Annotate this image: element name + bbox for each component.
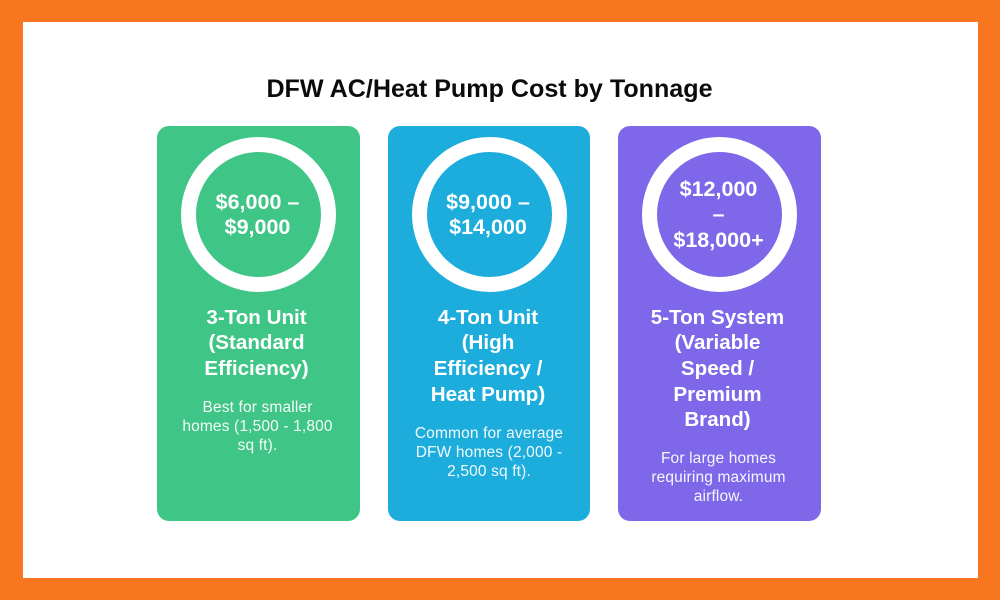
heading: 5-ton: Premium — [673, 383, 762, 406]
panel: 3-ton unit — [157, 126, 360, 521]
description: 5-ton: requiring maximum — [651, 469, 786, 486]
price circle: 5-ton: $18,000+ — [673, 228, 764, 252]
heading: 4-ton: Efficiency / — [434, 357, 542, 380]
price circle: 3-ton — [181, 136, 336, 292]
heading: 3-ton: 3-Ton Unit — [206, 306, 307, 328]
description: 3-ton: homes (1,500 - 1,800 — [182, 418, 333, 435]
description: 4-ton — [415, 424, 563, 480]
heading: 3-ton: Efficiency) — [204, 357, 309, 380]
description: 5-ton: airflow. — [694, 488, 743, 505]
title: DFW AC/Heat Pump Cost by Tonnage — [266, 75, 713, 103]
description: 5-ton — [651, 450, 786, 505]
heading: 4-ton: 4-Ton Unit — [438, 306, 538, 328]
heading: 4-ton: (High — [462, 331, 514, 354]
description: 3-ton — [182, 398, 333, 454]
heading: 3-ton — [204, 306, 309, 380]
description: 3-ton: Best for smaller — [202, 398, 313, 416]
price circle: 3-ton: $6,000 – — [216, 190, 299, 214]
heading: 4-ton: Heat Pump) — [431, 383, 545, 406]
description: 5-ton: For large homes — [661, 450, 776, 466]
price circle: 4-ton — [412, 136, 566, 292]
heading: 5-ton: 5-Ton System — [651, 306, 784, 328]
price circle: 5-ton: $12,000 — [680, 177, 757, 201]
price circle: 3-ton: $9,000 — [225, 215, 290, 239]
heading: 3-ton: (Standard — [208, 331, 305, 354]
heading: 5-ton: Brand) — [684, 408, 751, 431]
price circle: 4-ton: $14,000 — [449, 215, 527, 239]
panel: 4-ton unit — [388, 126, 590, 521]
heading: 5-ton: Speed / — [681, 357, 754, 380]
description: 4-ton: Common for average — [415, 424, 563, 442]
heading: 4-ton — [431, 306, 545, 406]
description: 4-ton: 2,500 sq ft). — [447, 463, 531, 480]
price circle: 5-ton: – — [713, 202, 724, 226]
description: 4-ton: DFW homes (2,000 - — [416, 444, 562, 461]
heading: 5-ton — [651, 306, 784, 431]
price circle: 4-ton: $9,000 – — [446, 190, 530, 214]
description: 3-ton: sq ft). — [238, 437, 277, 454]
price circle: 5-ton — [642, 136, 797, 292]
panel: 5-ton system — [618, 126, 821, 521]
heading: 5-ton: (Variable — [675, 331, 760, 354]
